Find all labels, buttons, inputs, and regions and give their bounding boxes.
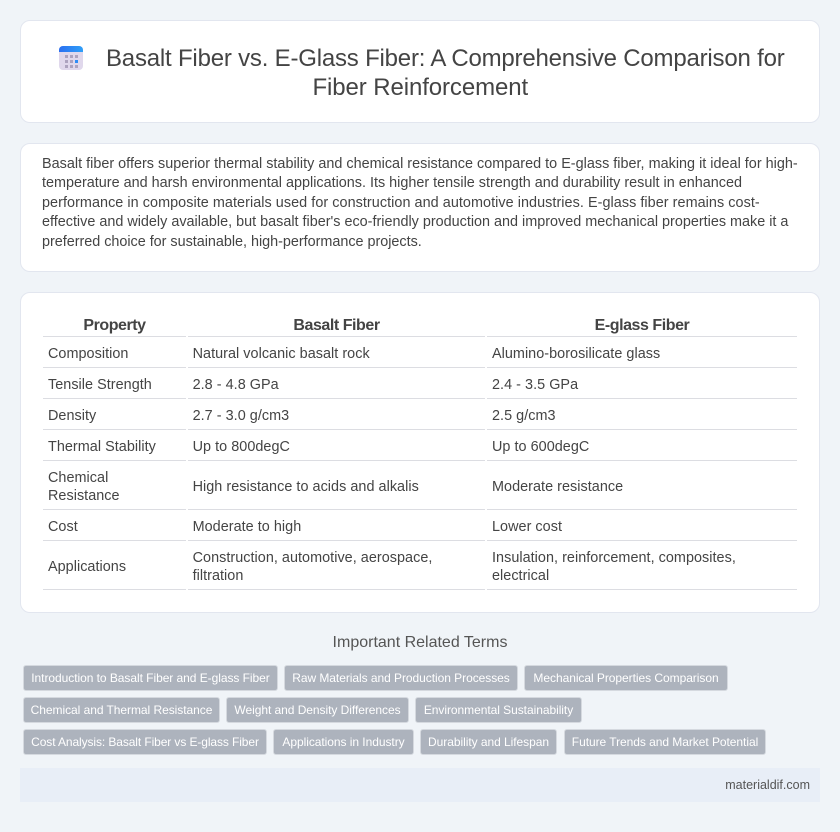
related term tags <box>23 665 766 755</box>
comparison table: Lower cost <box>492 519 562 535</box>
footer bar <box>20 768 820 802</box>
related term tags: Durability and Lifespan <box>428 735 549 749</box>
comparison table: Natural volcanic basalt rock <box>193 346 370 362</box>
comparison table: Density <box>48 408 96 424</box>
comparison table: Up to 600degC <box>492 439 589 455</box>
panel: summary card <box>20 143 820 272</box>
comparison table: Applications <box>48 559 126 575</box>
title: Fiber Reinforcement <box>312 74 528 101</box>
heading: related terms: Important Related Terms <box>333 634 507 651</box>
related term tags: Introduction to Basalt Fiber and E-glass Fiber <box>31 671 270 685</box>
panel: comparison table card <box>20 292 820 613</box>
comparison table: 2.5 g/cm3 <box>492 408 556 424</box>
comparison table: Insulation, reinforcement, composites, <box>492 550 736 566</box>
related term tags: Environmental Sustainability <box>424 703 573 717</box>
summary text: Basalt fiber offers superior thermal stability and chemical resistance compared to E-glass fiber, making it ideal for high- <box>42 156 798 172</box>
title: Basalt Fiber vs. E-Glass Fiber: A Comprehensive Comparison for <box>106 45 785 72</box>
comparison table: Alumino-borosilicate glass <box>492 346 660 362</box>
comparison table: Moderate resistance <box>492 479 623 495</box>
comparison table: High resistance to acids and alkalis <box>193 479 419 495</box>
footer site name: materialdif.com <box>725 778 810 792</box>
icon: calendar <box>59 46 83 70</box>
comparison table <box>43 317 797 590</box>
summary text <box>42 156 798 250</box>
summary text: effective and widely available, but basalt fiber's eco-friendly production and improved mechanical properties make it a <box>42 214 788 230</box>
comparison table: 2.4 - 3.5 GPa <box>492 377 578 393</box>
related term tags: Chemical and Thermal Resistance <box>31 703 212 717</box>
related term tags: Cost Analysis: Basalt Fiber vs E-glass Fiber <box>31 735 259 749</box>
comparison table: Cost <box>48 519 78 535</box>
title <box>106 45 785 101</box>
comparison table: Tensile Strength <box>48 377 152 393</box>
comparison table: Up to 800degC <box>193 439 290 455</box>
comparison table: Basalt Fiber <box>293 317 380 334</box>
comparison table: 2.8 - 4.8 GPa <box>193 377 279 393</box>
comparison table: Thermal Stability <box>48 439 156 455</box>
summary text: preferred choice for sustainable, high-performance projects. <box>42 234 422 250</box>
related term tags: Future Trends and Market Potential <box>572 735 758 749</box>
panel: title card <box>20 20 820 123</box>
comparison table: Property <box>83 317 146 334</box>
comparison table: E-glass Fiber <box>595 317 689 334</box>
related term tags: Applications in Industry <box>282 735 405 749</box>
comparison table: Resistance <box>48 488 120 504</box>
comparison table: filtration <box>193 568 243 584</box>
related term tags: Weight and Density Differences <box>234 703 401 717</box>
summary text: temperature and harsh environmental applications. Its higher tensile strength and durability result in enhanced <box>42 175 742 191</box>
comparison table: Construction, automotive, aerospace, <box>193 550 432 566</box>
related term tags: Raw Materials and Production Processes <box>292 671 510 685</box>
comparison table: electrical <box>492 568 549 584</box>
comparison table: 2.7 - 3.0 g/cm3 <box>193 408 289 424</box>
comparison table: Chemical <box>48 470 108 486</box>
comparison table: Composition <box>48 346 128 362</box>
related term tags: Mechanical Properties Comparison <box>533 671 719 685</box>
summary text: performance in composite materials used for construction and automotive industries. E-glass fiber remains cost- <box>42 195 760 211</box>
comparison table: Moderate to high <box>193 519 301 535</box>
